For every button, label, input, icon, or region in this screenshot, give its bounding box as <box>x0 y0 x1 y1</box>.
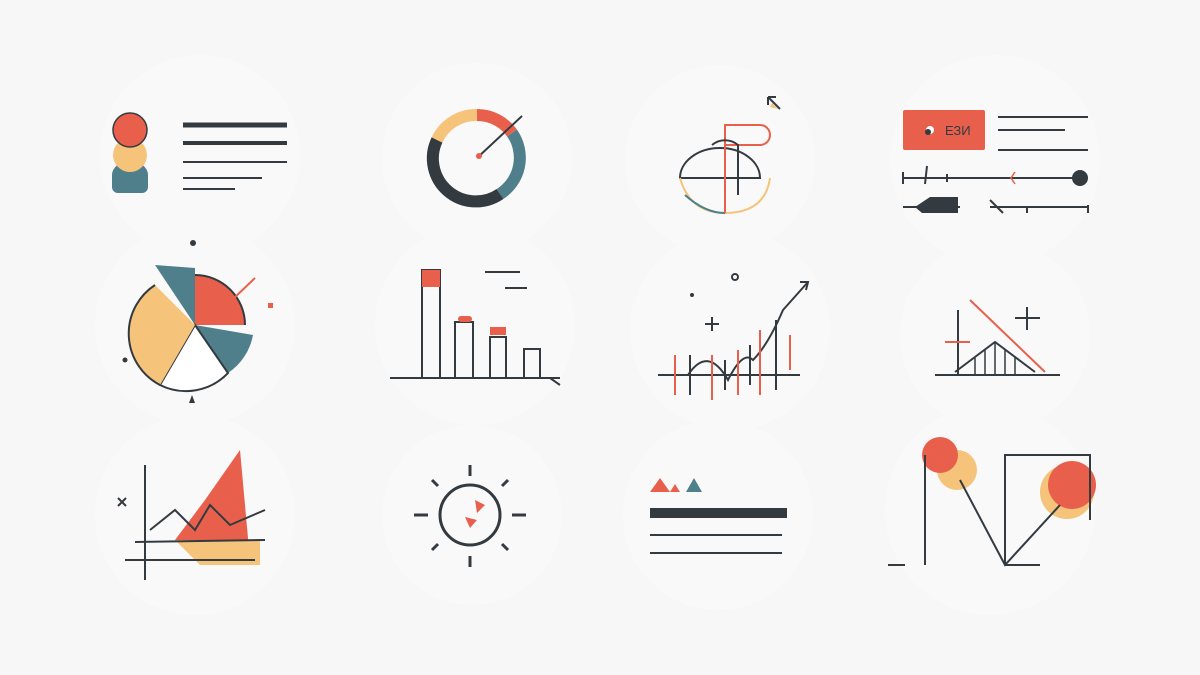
icon: target circle <box>414 465 526 567</box>
icon: triangles with text lines <box>650 478 787 553</box>
icon: area chart <box>118 450 265 580</box>
icon: label card with timeline <box>903 110 1088 213</box>
icon: bar chart <box>390 270 560 385</box>
icon: pie chart <box>122 240 273 403</box>
icon: trend line chart <box>658 274 808 400</box>
icon: abstract line figure <box>680 97 780 213</box>
icon: triangle graph <box>935 300 1060 375</box>
icon: stacked circles with text lines <box>112 113 287 193</box>
icon: donut gauge <box>433 115 522 201</box>
icon: label card with timeline: ЕЗИ <box>945 123 971 138</box>
icon: circles scatter <box>888 437 1096 565</box>
